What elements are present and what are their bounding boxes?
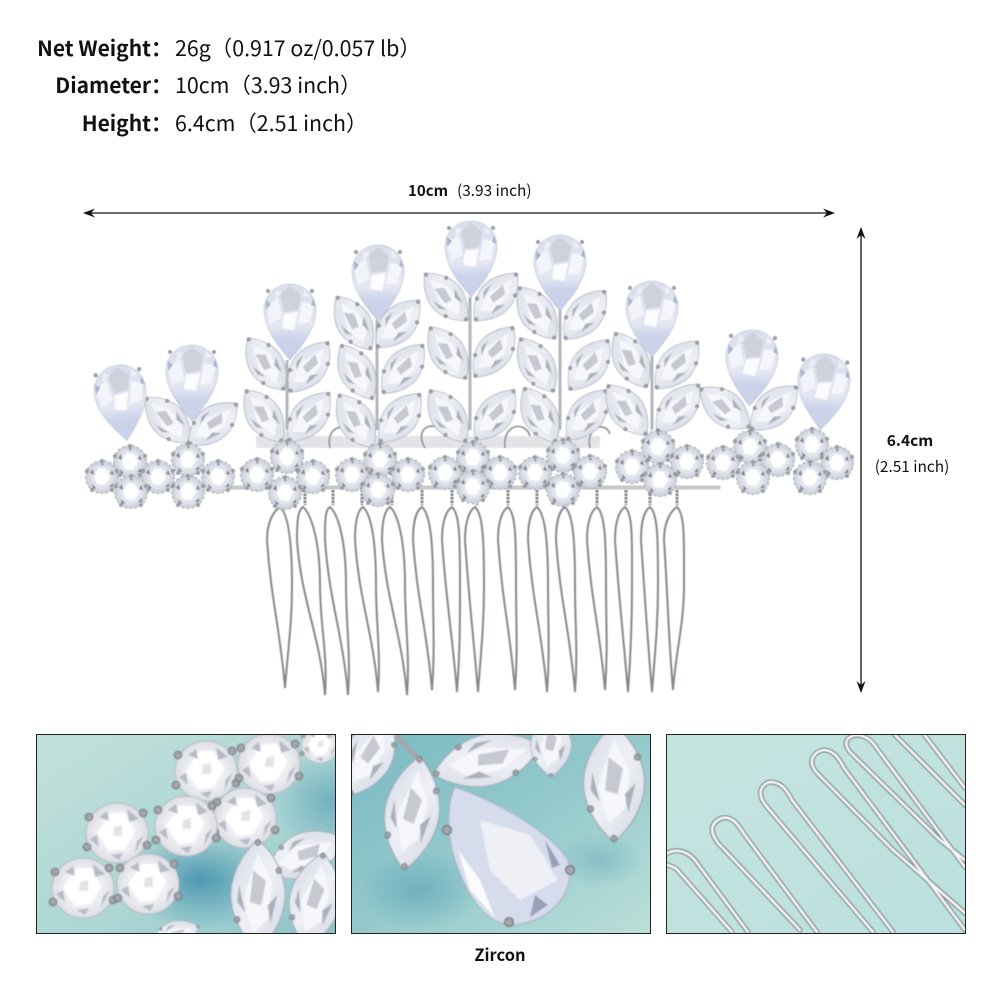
- width dimension label: (3.93 inch): [457, 179, 532, 201]
- height dimension label: 6.4cm: [887, 429, 933, 451]
- height dimension label: [875, 429, 949, 477]
- spec: net weight: 26g（0.917 oz/0.057 lb）: [175, 32, 421, 63]
- spec: diameter: 10cm（3.93 inch）: [175, 69, 361, 100]
- spec: net weight: [37, 32, 421, 63]
- arrow: height: [856, 227, 866, 693]
- spec: height: 6.4cm（2.51 inch）: [175, 107, 367, 138]
- spec: height: [82, 107, 367, 138]
- comb twisted joints: [305, 490, 677, 505]
- photo 1 frame: [36, 734, 336, 934]
- teardrop stones: [91, 221, 852, 444]
- height dimension label: (2.51 inch): [875, 455, 949, 477]
- comb back plate and rail: [228, 426, 720, 489]
- stems: [287, 297, 652, 430]
- photo: comb teeth close-up: [662, 733, 965, 933]
- specification text block: [37, 32, 421, 138]
- caption: zircon: Zircon: [474, 942, 526, 966]
- photo 3 frame: [666, 734, 966, 934]
- spec: diameter: [55, 69, 361, 100]
- width dimension label: [408, 179, 532, 201]
- width dimension label: 10cm: [408, 180, 448, 201]
- photo 2 frame: [352, 734, 650, 934]
- spec: diameter: Diameter：: [55, 70, 172, 100]
- arrow: width: [83, 208, 835, 218]
- comb teeth: [267, 507, 684, 695]
- spec: height: Height：: [82, 108, 172, 138]
- spec: net weight: Net Weight：: [37, 33, 172, 63]
- photo: round zircon close-up: [37, 735, 335, 933]
- photo: teardrop zircon close-up: [352, 735, 650, 933]
- marquise leaves: [133, 262, 809, 458]
- product: hair comb: [85, 221, 854, 695]
- round stone clusters: [85, 427, 854, 510]
